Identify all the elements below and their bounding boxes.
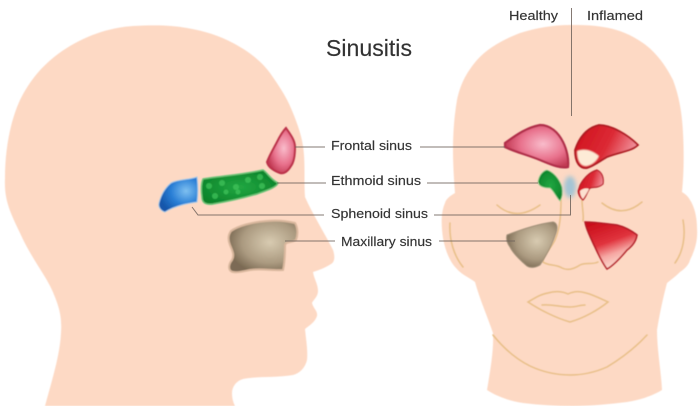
label: Ethmoid sinus: Ethmoid sinus <box>331 174 421 188</box>
label: Inflamed: Inflamed <box>587 9 643 23</box>
leader lines <box>192 8 572 241</box>
healthy sphenoid sinus <box>564 176 576 198</box>
sphenoid sinus, side <box>159 177 198 212</box>
left cheek line <box>450 223 463 267</box>
title: Sinusitis <box>326 35 412 61</box>
sphenoid sinus leaders <box>192 195 570 215</box>
ethmoid sinus leaders <box>277 182 538 184</box>
inflamed ethmoid sinus <box>578 170 603 200</box>
right eye line <box>602 202 642 211</box>
healthy frontal sinus <box>505 125 568 167</box>
frontal sinus leaders <box>295 146 505 148</box>
side profile head <box>5 25 334 406</box>
label: Sphenoid sinus: Sphenoid sinus <box>331 207 428 221</box>
maxillary sinus, side <box>229 221 297 272</box>
inflamed frontal sinus <box>575 125 638 168</box>
label: Maxillary sinus: Maxillary sinus <box>341 235 432 249</box>
frontal sinus fluid <box>577 150 599 166</box>
chin line <box>493 335 647 375</box>
front view sinuses <box>505 125 638 269</box>
label: Frontal sinus: Frontal sinus <box>331 139 412 153</box>
label: Healthy: Healthy <box>509 9 559 23</box>
face features: eyes, nose, cheeks, lips, chin <box>450 200 684 375</box>
maxillary sinus leaders <box>285 240 515 242</box>
frontal sinus, side <box>267 128 295 173</box>
ethmoid sinus texture <box>206 174 265 199</box>
right cheek line <box>675 220 684 263</box>
ethmoid sinus, side <box>201 170 278 204</box>
healthy ethmoid sinus <box>538 170 562 201</box>
left eye line <box>497 205 540 214</box>
healthy maxillary sinus <box>507 222 557 267</box>
healthy inflamed divider <box>570 8 572 116</box>
nose outline <box>543 200 598 269</box>
lips <box>528 292 608 322</box>
inflamed maxillary sinus <box>585 222 637 269</box>
side view sinuses <box>159 128 297 272</box>
inflamed ethmoid fluid <box>580 188 589 199</box>
front view face <box>442 25 697 406</box>
